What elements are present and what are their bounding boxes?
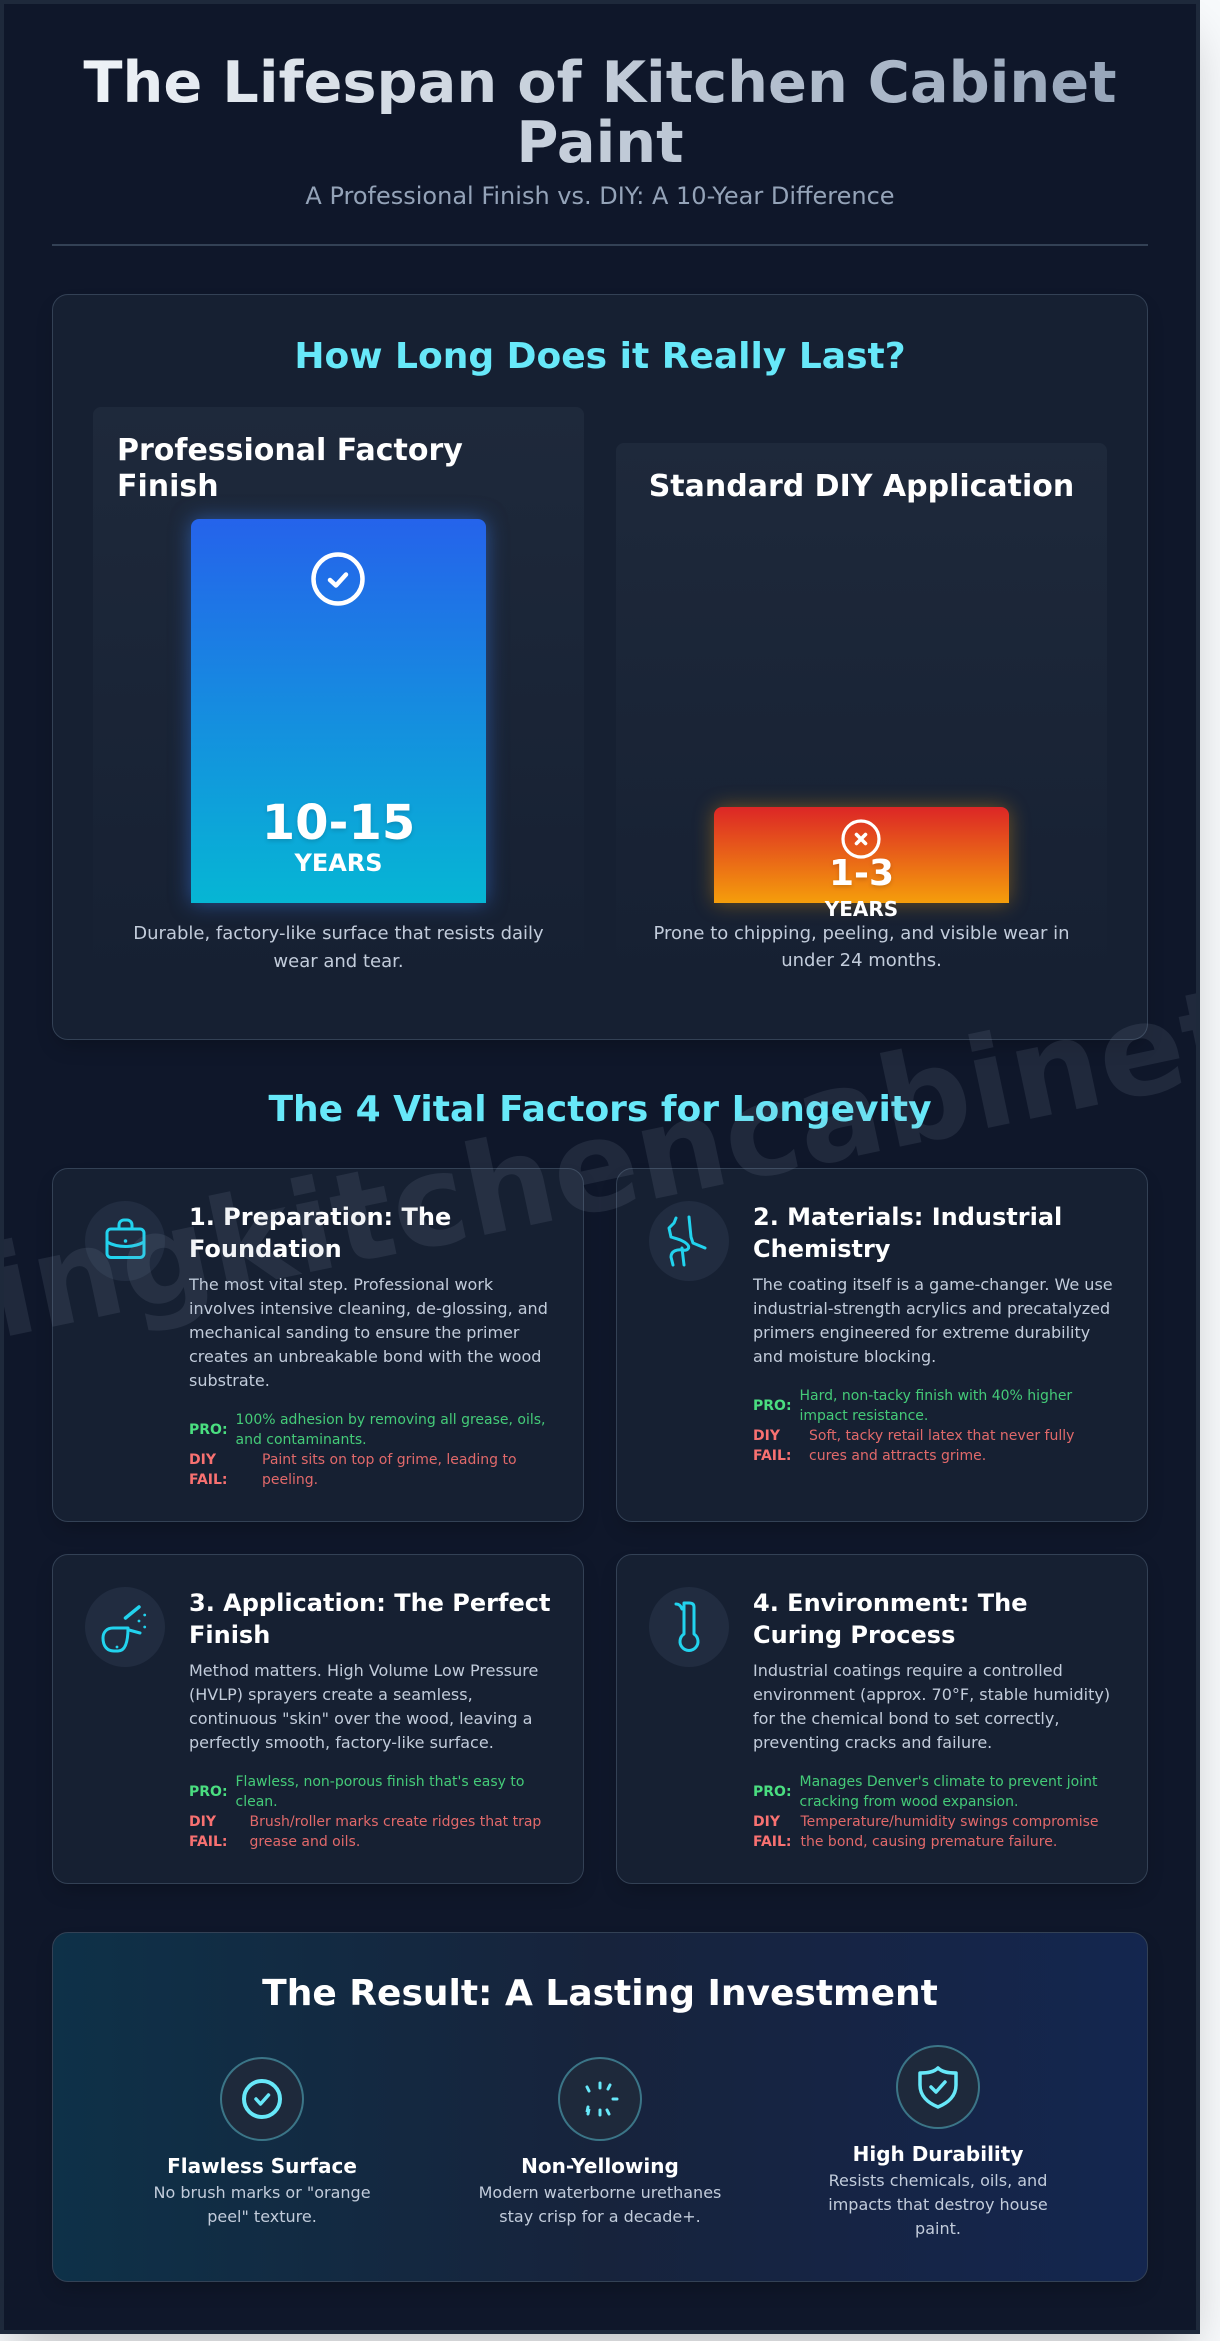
column: professional factory finish [93, 407, 584, 991]
DIY fail point [189, 1452, 517, 1488]
panel: result [52, 1932, 1148, 2282]
pro point [753, 1388, 1072, 1424]
icon: x circle [841, 819, 881, 859]
pro point: Manages Denver's climate to prevent joint [800, 1774, 1098, 1790]
icon: thermometer [649, 1587, 729, 1667]
column heading: Professional Factory [117, 432, 463, 468]
column description: Prone to chipping, peeling, and visible wear in [653, 922, 1070, 944]
panel: how long does it last [52, 294, 1148, 1040]
icon: spray [85, 1587, 165, 1667]
card text: (HVLP) sprayers create a seamless, [189, 1685, 473, 1704]
card: preparation [52, 1168, 584, 1522]
pro point: PRO: [189, 1422, 228, 1438]
DIY fail point: Paint sits on top of grime, leading to [262, 1452, 517, 1468]
card text: Industrial coatings require a controlled [753, 1661, 1063, 1680]
benefit text [479, 2183, 721, 2226]
card text: creates an unbreakable bond with the wood [189, 1347, 541, 1366]
card heading [753, 1203, 1062, 1263]
card text: primers engineered for extreme durability [753, 1323, 1090, 1342]
benefit text: Resists chemicals, oils, and [829, 2171, 1047, 2190]
DIY fail point [753, 1814, 1099, 1850]
card text: Method matters. High Volume Low Pressure [189, 1661, 538, 1680]
DIY fail point: DIY [753, 1428, 780, 1444]
benefit heading: Non-Yellowing [521, 2154, 679, 2178]
card text [188, 1275, 548, 1390]
DIY fail point: Temperature/humidity swings compromise [800, 1814, 1099, 1830]
icon: sparkle dashes [558, 2057, 642, 2141]
card: environment [616, 1554, 1148, 1884]
card text: involves intensive cleaning, de-glossing, and [189, 1299, 548, 1318]
benefit: non-yellowing [479, 2057, 721, 2226]
pro point: Flawless, non-porous finish that's easy to [236, 1774, 524, 1790]
icon: check circle [311, 552, 365, 606]
card text: industrial-strength acrylics and precatalyzed [753, 1299, 1110, 1318]
DIY fail point: FAIL: [753, 1448, 792, 1464]
DIY fail point: cures and attracts grime. [809, 1448, 986, 1464]
card text: for the chemical bond to set correctly, [753, 1709, 1059, 1728]
pro point: cracking from wood expansion. [800, 1794, 1018, 1810]
DIY fail point [189, 1814, 541, 1850]
pro point: PRO: [753, 1398, 792, 1414]
icon: briefcase [85, 1201, 165, 1281]
DIY fail point: grease and oils. [250, 1834, 360, 1850]
pro point: PRO: [189, 1784, 228, 1800]
card text: environment (approx. 70°F, stable humidity) [753, 1685, 1110, 1704]
pro point [189, 1774, 524, 1810]
pro point: PRO: [753, 1784, 792, 1800]
card text: perfectly smooth, factory-like surface. [189, 1733, 494, 1752]
pro point: 100% adhesion by removing all grease, oils, [236, 1412, 546, 1428]
DIY fail point [753, 1428, 1074, 1464]
panel heading: How Long Does it Really Last? [294, 336, 906, 376]
column description: Durable, factory-like surface that resists daily [133, 923, 544, 944]
card heading: Chemistry [753, 1235, 890, 1263]
pro point [753, 1774, 1098, 1810]
benefit text: paint. [915, 2219, 961, 2238]
card text [752, 1275, 1113, 1366]
DIY fail point: DIY [189, 1452, 216, 1468]
DIY fail point: FAIL: [753, 1834, 792, 1850]
card heading: 2. Materials: Industrial [753, 1203, 1062, 1231]
DIY fail point: Brush/roller marks create ridges that trap [250, 1814, 541, 1830]
pro point [189, 1412, 546, 1448]
column description: under 24 months. [781, 950, 942, 971]
value: 1-3 [829, 852, 894, 894]
column heading: Standard DIY Application [649, 468, 1074, 504]
pro point: impact resistance. [800, 1408, 928, 1424]
card heading: Finish [189, 1621, 270, 1649]
pro point: clean. [236, 1794, 278, 1810]
benefit text: No brush marks or "orange [153, 2183, 371, 2202]
card heading [189, 1589, 550, 1649]
unit: YEARS [294, 849, 383, 877]
DIY fail point: DIY [753, 1814, 780, 1830]
panel heading: The Result: A Lasting Investment [262, 1973, 938, 2014]
bar: 10-15 years [191, 519, 486, 903]
benefit: flawless surface [153, 2057, 371, 2226]
bar: 1-3 years [714, 807, 1009, 903]
value: 10-15 [262, 795, 415, 851]
DIY fail point: DIY [189, 1814, 216, 1830]
DIY fail point: FAIL: [189, 1834, 228, 1850]
column description [133, 923, 544, 972]
column heading [117, 432, 463, 504]
DIY fail point: FAIL: [189, 1472, 228, 1488]
card text: continuous "skin" over the wood, leaving a [189, 1709, 532, 1728]
benefit: high durability [828, 2045, 1048, 2238]
card: application [52, 1554, 584, 1884]
title: The Lifespan of Kitchen Cabinet [83, 49, 1117, 116]
icon: shield check [896, 2045, 980, 2129]
icon: chemistry squiggle [649, 1201, 729, 1281]
card text: The coating itself is a game-changer. We use [753, 1275, 1113, 1294]
column description [653, 922, 1070, 971]
title [52, 53, 1148, 173]
card heading [753, 1589, 1027, 1649]
card heading: 1. Preparation: The [189, 1203, 451, 1231]
card heading: 3. Application: The Perfect [189, 1589, 550, 1617]
benefit text [828, 2171, 1048, 2238]
card heading: Curing Process [753, 1621, 955, 1649]
benefit text: peel" texture. [207, 2207, 317, 2226]
card text: and moisture blocking. [753, 1347, 936, 1366]
card heading: Foundation [189, 1235, 342, 1263]
subtitle: A Professional Finish vs. DIY: A 10-Year Difference [305, 182, 895, 210]
card text: preventing cracks and failure. [753, 1733, 992, 1752]
card text [189, 1661, 538, 1752]
DIY fail point: the bond, causing premature failure. [800, 1834, 1057, 1850]
pro point: Hard, non-tacky finish with 40% higher [800, 1388, 1072, 1404]
card text [753, 1661, 1110, 1752]
benefit text: impacts that destroy house [828, 2195, 1048, 2214]
DIY fail point: peeling. [262, 1472, 318, 1488]
card text: The most vital step. Professional work [189, 1275, 493, 1294]
card text: mechanical sanding to ensure the primer [189, 1323, 519, 1342]
DIY fail point: Soft, tacky retail latex that never fully [809, 1428, 1074, 1444]
benefit text: Modern waterborne urethanes [479, 2183, 721, 2202]
column description: wear and tear. [273, 950, 404, 972]
benefit text [153, 2183, 371, 2226]
icon: check circle [220, 2057, 304, 2141]
unit: YEARS [825, 897, 898, 921]
card: materials [616, 1168, 1148, 1522]
title: Paint [516, 109, 684, 176]
section heading: vital factors: The 4 Vital Factors for Longevity [268, 1088, 932, 1130]
benefit text: stay crisp for a decade+. [499, 2207, 701, 2226]
card text: substrate. [189, 1371, 270, 1390]
column: standard DIY application [616, 443, 1107, 991]
card heading [189, 1203, 451, 1263]
benefit heading: High Durability [853, 2142, 1023, 2166]
benefit heading: Flawless Surface [167, 2154, 357, 2178]
pro point: and contaminants. [236, 1432, 367, 1448]
column heading: Finish [117, 468, 219, 504]
card heading: 4. Environment: The [753, 1589, 1027, 1617]
